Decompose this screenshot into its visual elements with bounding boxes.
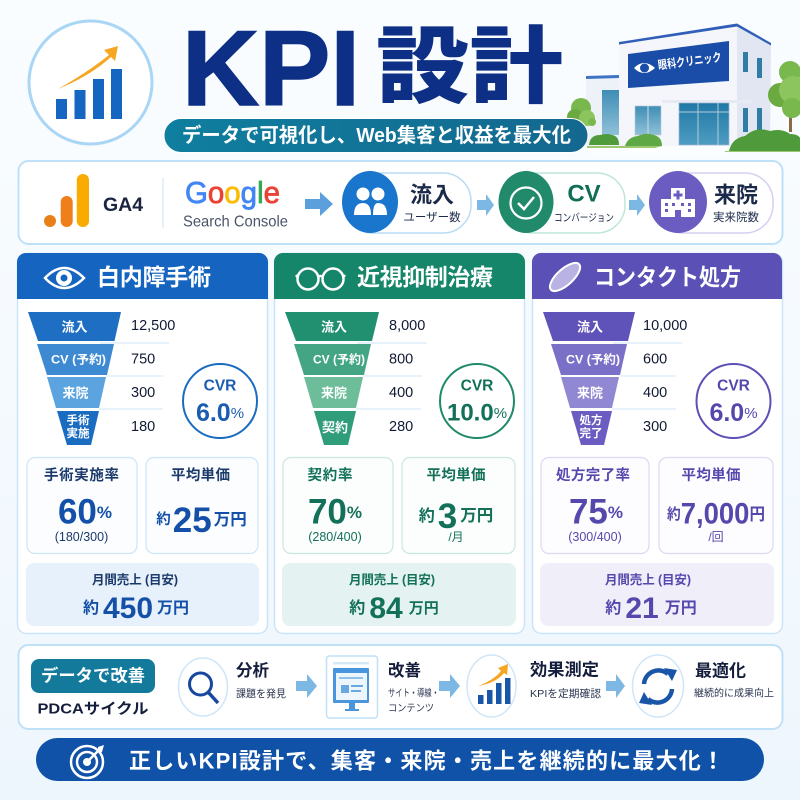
step: 流入: ユーザー数 <box>403 211 461 224</box>
card: 平均単価: 平均単価 <box>682 466 740 484</box>
funnel: CV (予約) <box>51 352 106 366</box>
funnel values: 750 <box>131 352 155 368</box>
CVR badge <box>696 364 770 438</box>
card: monthly revenue: 月間売上 (目安) <box>349 572 435 587</box>
step: 来院: 来院 <box>714 182 758 208</box>
trees and shrubs <box>567 61 800 155</box>
card: 契約率: 契約率 <box>308 466 352 484</box>
funnel values: 300 <box>131 385 155 401</box>
CVR badge: CVR <box>204 378 236 394</box>
step: CV: コンバージョン <box>554 212 614 224</box>
card: monthly revenue <box>26 563 259 626</box>
card: 平均単価 <box>402 458 515 554</box>
card: monthly revenue: 月間売上 (目安) <box>605 572 691 587</box>
subtitle banner: データで可視化し、Web集客と収益を最大化 <box>182 123 571 147</box>
header <box>532 253 782 299</box>
funnel values: 280 <box>389 419 413 435</box>
funnel values: 10,000 <box>643 318 687 334</box>
arrow <box>296 674 317 698</box>
card: 契約率 <box>283 458 393 554</box>
step: 効果測定: 効果測定 <box>530 660 599 680</box>
CVR badge: 6.0% <box>709 399 758 427</box>
label: データで改善: データで改善 <box>41 666 145 686</box>
arrow <box>305 192 333 216</box>
step: 改善: 改善 <box>388 660 421 680</box>
funnel: CV (予約) <box>313 352 365 366</box>
icon: GA4 logo: GA4 <box>103 194 143 216</box>
card: monthly revenue: 約21 万円 <box>605 592 697 624</box>
funnel <box>285 312 379 445</box>
card: 契約率: 70% <box>308 492 362 532</box>
CVR badge: CVR <box>461 378 493 394</box>
card: 平均単価: 約7,000円 <box>667 498 765 530</box>
arrow <box>606 674 625 698</box>
icon: growth chart logo <box>29 21 152 144</box>
Google Search Console logo: Google <box>185 174 280 210</box>
funnel values: 180 <box>131 419 155 435</box>
step: 分析: 分析 <box>236 660 270 680</box>
funnel: 完了 <box>580 426 602 440</box>
step: CV: CV <box>567 180 601 208</box>
card: 平均単価 <box>146 458 258 554</box>
funnel values: 400 <box>643 385 667 401</box>
label: PDCA: PDCAサイクル <box>38 700 148 718</box>
funnel values: 600 <box>643 352 667 368</box>
funnel <box>28 312 121 445</box>
funnel: 実施 <box>66 426 90 440</box>
card: 平均単価 <box>659 458 773 554</box>
funnel values: 300 <box>643 419 667 435</box>
card: 平均単価: 約3万円 <box>419 496 493 536</box>
funnel: 手術 <box>66 413 90 427</box>
funnel: 来院 <box>577 386 603 400</box>
card: 処方完了率: 処方完了率 <box>556 466 630 484</box>
CVR badge <box>440 364 514 438</box>
title <box>182 8 563 128</box>
title: 設計 <box>376 20 563 114</box>
card: 平均単価: /月 <box>448 530 464 544</box>
panel: コンタクト処方 <box>532 253 782 634</box>
card: 契約率: (280/400) <box>308 530 362 544</box>
footer banner <box>36 738 764 781</box>
step: 来院 <box>649 171 773 233</box>
card: monthly revenue: 約450万円 <box>83 592 189 624</box>
icon: GA4 logo <box>44 174 143 227</box>
funnel values <box>612 318 687 435</box>
header: 白内障手術 <box>97 264 211 290</box>
step: 改善: コンテンツ <box>388 704 434 714</box>
CVR badge <box>183 364 257 438</box>
step: 分析: 課題を発見 <box>236 687 286 700</box>
card: 手術実施率: (180/300) <box>55 530 108 544</box>
step: 流入 <box>342 171 471 233</box>
card: 処方完了率: 75% <box>569 492 623 532</box>
CVR badge: CVR <box>717 378 750 394</box>
Google Search Console logo <box>183 174 288 230</box>
funnel: 処方 <box>580 413 602 427</box>
card: 平均単価: /回 <box>708 530 724 544</box>
card: 手術実施率: 手術実施率 <box>44 466 119 484</box>
step: 最適化: 継続的に成果向上 <box>694 686 774 700</box>
funnel: 流入 <box>321 320 347 334</box>
title: KPI <box>182 8 360 128</box>
subtitle banner <box>164 118 588 152</box>
funnel: 来院 <box>321 386 347 400</box>
funnel values: 8,000 <box>389 318 425 334</box>
arrow <box>629 194 645 216</box>
card: 平均単価: 平均単価 <box>426 466 486 484</box>
main block <box>619 24 771 147</box>
CVR badge: 6.0% <box>196 399 244 427</box>
funnel: 流入 <box>577 320 603 334</box>
step: 効果測定: KPIを定期確認 <box>530 687 601 700</box>
step: 最適化 <box>632 655 774 717</box>
step: CV <box>498 171 625 233</box>
card: 手術実施率 <box>27 458 137 554</box>
panel: PDCA cycle <box>18 645 782 729</box>
card: monthly revenue <box>540 563 774 626</box>
CVR badge: 10.0% <box>447 400 507 426</box>
step: 分析 <box>178 658 286 716</box>
funnel values: 800 <box>389 352 413 368</box>
header <box>17 253 268 299</box>
illustration: eye clinic building <box>567 24 800 155</box>
funnel <box>543 312 635 445</box>
funnel values: 400 <box>389 385 413 401</box>
panel: data flow <box>18 161 782 244</box>
step: 来院: 実来院数 <box>713 211 759 224</box>
arrow <box>439 674 460 698</box>
funnel values <box>356 318 427 435</box>
main block: 眼科クリニック <box>657 49 722 72</box>
card: monthly revenue <box>282 563 516 626</box>
card: monthly revenue: 月間売上 (目安) <box>92 572 178 587</box>
Google Search Console logo: Search Console <box>183 214 288 230</box>
panel: 近視抑制治療 <box>274 253 525 634</box>
card: 平均単価: 約25万円 <box>156 500 247 540</box>
funnel values: 12,500 <box>131 318 175 334</box>
card: 平均単価: 平均単価 <box>171 466 230 484</box>
funnel values <box>99 318 175 435</box>
card: monthly revenue: 約84 万円 <box>349 592 439 624</box>
label: データで改善 <box>31 659 155 693</box>
step: 効果測定 <box>467 655 601 717</box>
icon: target <box>71 745 104 778</box>
step: 改善: サイト・導線・ <box>388 686 439 700</box>
funnel: 流入 <box>61 320 88 334</box>
header <box>274 253 525 299</box>
arrow <box>477 194 494 216</box>
card: 処方完了率: (300/400) <box>568 530 622 544</box>
header: 近視抑制治療 <box>357 264 493 290</box>
funnel: 契約 <box>322 420 348 435</box>
left wing <box>586 75 620 146</box>
header: コンタクト処方 <box>594 264 741 290</box>
footer banner: 正しいKPI設計で、集客・来院・売上を継続的に最大化！ <box>129 748 724 774</box>
step: 流入: 流入 <box>410 182 454 208</box>
card: 処方完了率 <box>541 458 649 554</box>
card: 手術実施率: 60% <box>58 492 112 532</box>
panel: 白内障手術 <box>17 253 268 634</box>
funnel: CV (予約) <box>566 352 620 366</box>
step: 改善 <box>326 656 439 718</box>
funnel: 来院 <box>62 386 89 400</box>
step: 最適化: 最適化 <box>695 662 746 680</box>
